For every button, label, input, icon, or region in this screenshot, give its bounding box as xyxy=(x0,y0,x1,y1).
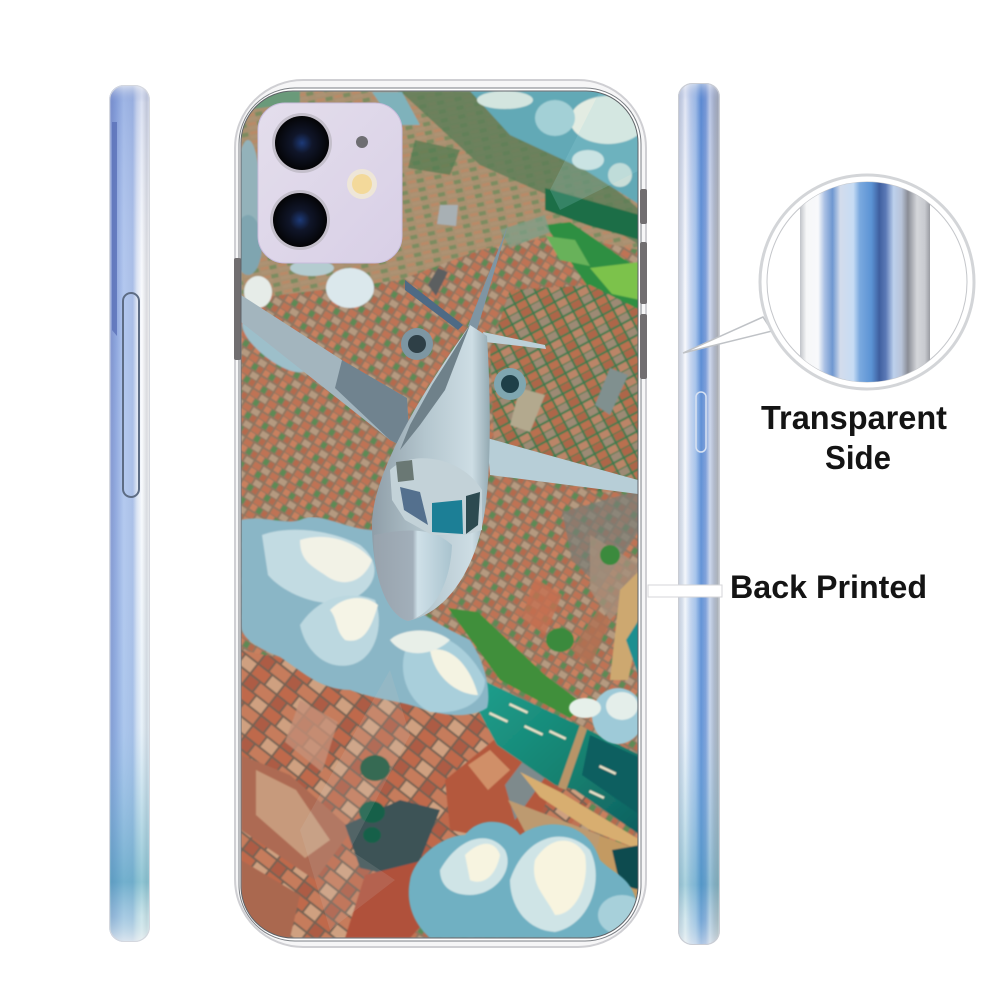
big left cloud xyxy=(241,517,646,938)
pointer wedge xyxy=(683,317,772,353)
bridge xyxy=(558,725,587,790)
label: Transparent: Transparent xyxy=(761,399,947,436)
right side view of phone xyxy=(678,83,720,945)
main phone case xyxy=(234,80,647,947)
left clouds beside camera xyxy=(242,139,258,224)
back print artwork xyxy=(234,91,646,938)
green park xyxy=(545,222,640,312)
pointer: back printed xyxy=(648,585,722,597)
callout: magnifier showing transparent side xyxy=(683,170,974,395)
lower-left city xyxy=(241,650,600,938)
label: Side: Side xyxy=(825,439,891,476)
label: Back Printed: Back Printed xyxy=(730,569,927,605)
right mid district xyxy=(606,491,638,564)
river xyxy=(470,678,640,835)
green city district xyxy=(490,285,640,500)
left side view of phone xyxy=(109,85,150,942)
top right clouds xyxy=(470,91,646,205)
right small cloud xyxy=(569,688,644,744)
reflection glare xyxy=(550,91,640,210)
harbour xyxy=(596,836,638,898)
aeroplane xyxy=(241,225,638,621)
towers xyxy=(510,388,545,432)
camera module xyxy=(258,103,402,263)
boats xyxy=(489,703,616,799)
print glare lower left xyxy=(300,670,410,930)
volume button outline xyxy=(123,293,139,497)
bottom right clouds xyxy=(409,822,646,938)
distant landscape xyxy=(241,91,640,300)
side buttons on case xyxy=(234,189,647,379)
tree line along the river xyxy=(448,608,585,718)
